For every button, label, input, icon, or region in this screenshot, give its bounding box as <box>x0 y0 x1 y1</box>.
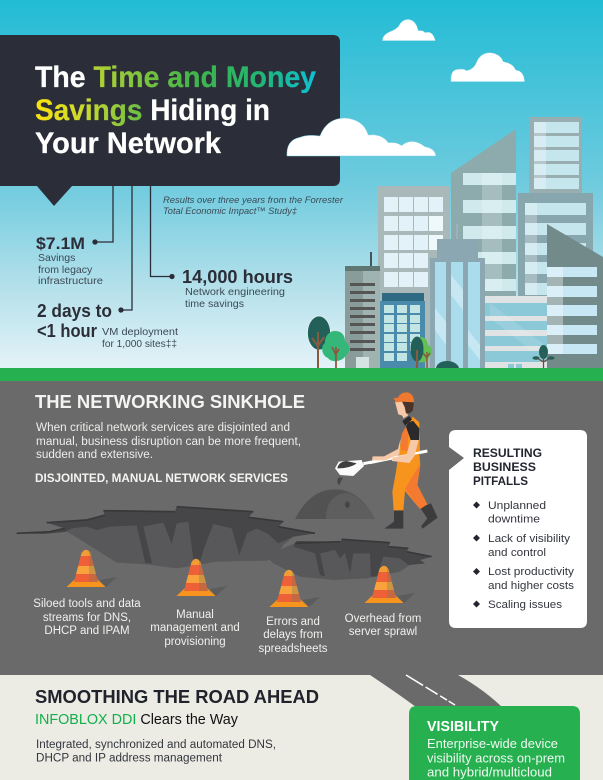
panel: resulting business pitfalls: RESULTING <box>473 446 542 460</box>
caption: errors and delays: spreadsheets <box>258 643 328 655</box>
stat: savings: from legacy <box>38 264 93 276</box>
panel: visibility <box>409 706 580 780</box>
stat: engineering hours: time savings <box>185 298 244 310</box>
stat: engineering hours <box>182 267 293 310</box>
stat: savings: $7.1M <box>36 234 85 253</box>
forrester study note: Total Economic Impact™ Study‡ <box>163 206 298 217</box>
subheading: infoblox ddi: INFOBLOX DDI Clears the Way <box>35 711 238 728</box>
caption: errors and delays: Errors and <box>266 616 320 628</box>
panel: resulting business pitfalls: Lack of visibility <box>488 533 570 545</box>
panel: resulting business pitfalls: Unplanned <box>488 500 546 512</box>
panel: resulting business pitfalls: BUSINESS <box>473 460 536 474</box>
panel: resulting business pitfalls: downtime <box>488 514 540 526</box>
stat: vm deployment: <1 hour <box>37 321 97 341</box>
beige section background <box>0 675 603 780</box>
panel: visibility: and hybrid/multicloud <box>427 766 552 780</box>
stat: vm deployment: VM deployment <box>102 326 178 338</box>
heading: smoothing the road ahead: SMOOTHING THE ROAD AHEAD <box>35 686 319 707</box>
caption: siloed tools: Siloed tools and data <box>33 598 141 610</box>
title panel <box>0 35 340 206</box>
dirt mound <box>295 489 375 519</box>
sky background <box>0 0 603 369</box>
right mid building <box>518 193 593 368</box>
stat: savings: infrastructure <box>38 275 103 287</box>
pointed glass tower <box>451 129 516 368</box>
stat: vm deployment <box>37 301 178 350</box>
panel: resulting business pitfalls: and control <box>488 547 546 559</box>
sinkhole crack small <box>267 539 432 580</box>
caption: server sprawl: Overhead from <box>345 613 421 625</box>
caption: server sprawl: server sprawl <box>349 626 417 638</box>
panel: resulting business pitfalls <box>449 430 587 628</box>
caption: errors and delays: delays from <box>263 629 323 641</box>
panel: visibility: visibility across on-prem <box>427 752 565 766</box>
back right tower <box>529 117 582 195</box>
cityscape buildings <box>345 117 603 368</box>
panel: visibility: Enterprise-wide device <box>427 737 558 751</box>
caption: siloed tools: streams for DNS, <box>43 612 131 624</box>
sinkhole section background <box>0 381 603 675</box>
title text: Savings Hiding in <box>35 94 277 127</box>
description text: DHCP and IP address management <box>36 752 223 764</box>
panel: resulting business pitfalls: Lost productivity <box>488 566 574 578</box>
clouds <box>287 19 525 156</box>
shovel <box>335 451 427 485</box>
front right dark building <box>547 224 603 368</box>
central tall glass tower <box>430 224 485 368</box>
caption: siloed tools: DHCP and IPAM <box>44 625 130 637</box>
traffic cone 3 <box>270 566 320 607</box>
caption: manual management: provisioning <box>164 636 226 648</box>
panel: resulting business pitfalls: and higher costs <box>488 580 574 592</box>
blue building <box>380 293 425 368</box>
stat: engineering hours: Network engineering <box>185 286 285 298</box>
sinkhole crack large <box>17 507 315 568</box>
traffic cone 2 <box>176 555 227 596</box>
worker <box>370 392 438 529</box>
stat: engineering hours: 14,000 hours <box>182 267 293 287</box>
green ground strip <box>0 368 603 381</box>
section heading: THE NETWORKING SINKHOLE <box>35 391 305 412</box>
light grey office block <box>378 186 450 368</box>
traffic cone 4 <box>364 562 415 603</box>
stat: vm deployment: for 1,000 sites‡‡ <box>102 338 177 350</box>
trees middle <box>410 336 459 368</box>
section description: manual, business disruption can be more frequent, <box>36 436 301 448</box>
caption: manual management: Manual <box>176 609 214 621</box>
section description: sudden and extensive. <box>36 449 153 461</box>
caption: manual management: management and <box>150 622 240 634</box>
tree small right <box>532 345 554 368</box>
small grey building <box>345 252 380 368</box>
panel: visibility: VISIBILITY <box>427 719 499 735</box>
stat: vm deployment: 2 days to <box>37 301 112 321</box>
trees left <box>308 316 349 368</box>
description text: Integrated, synchronized and automated DNS, <box>36 739 276 751</box>
forrester study note: Results over three years from the Forrester <box>163 195 344 206</box>
connector lines from title panel <box>93 186 174 312</box>
traffic cone 1 <box>66 546 117 587</box>
section description: When critical network services are disjointed and <box>36 422 290 434</box>
panel: resulting business pitfalls: Scaling issues <box>488 599 562 611</box>
title text: Your Network <box>35 127 222 160</box>
low striped building <box>485 296 547 368</box>
stat: savings <box>36 234 103 287</box>
subheading: DISJOINTED, MANUAL NETWORK SERVICES <box>35 473 288 485</box>
title text: The Time and Money <box>35 61 324 94</box>
forrester study note <box>163 195 344 217</box>
stat: savings: Savings <box>38 252 75 264</box>
road <box>370 675 505 710</box>
panel: resulting business pitfalls: PITFALLS <box>473 474 528 488</box>
